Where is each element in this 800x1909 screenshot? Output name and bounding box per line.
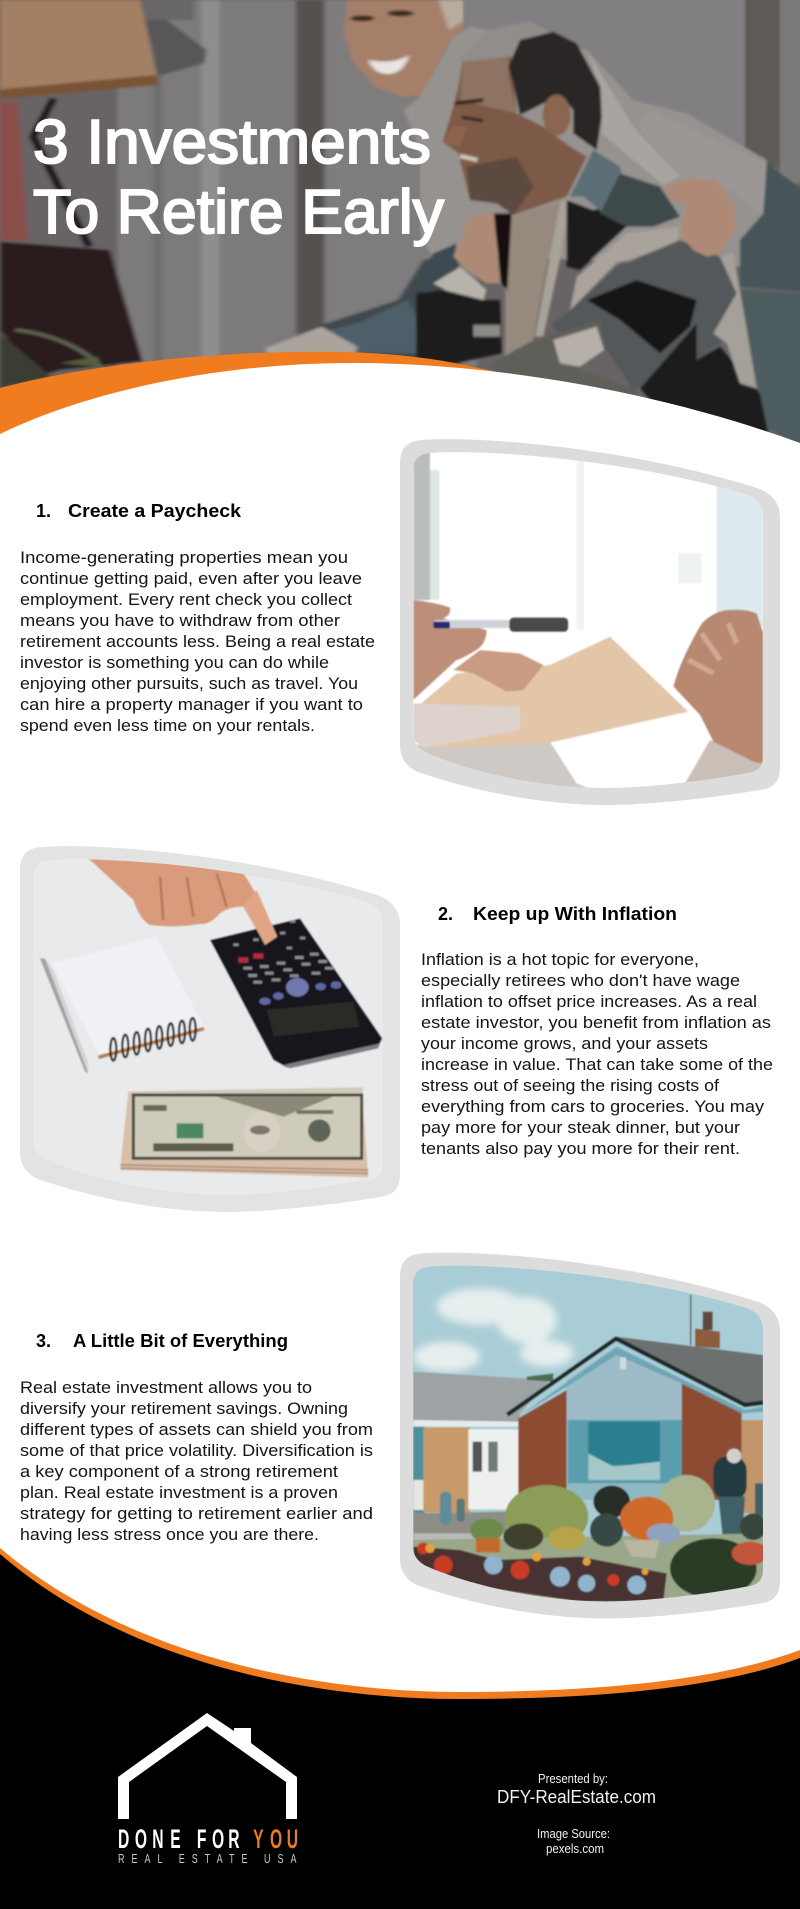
credits text: pexels.com — [546, 1841, 604, 1856]
body text 1: means you have to withdraw from other — [20, 612, 341, 630]
logo wordmark: DONE FOR — [118, 1824, 240, 1854]
body text 1: retirement accounts less. Being a real estate — [20, 633, 375, 651]
body text 1: employment. Every rent check you collect — [20, 591, 352, 609]
credits text: Presented by: — [538, 1771, 608, 1786]
logo: done for you real estate usa — [118, 1713, 298, 1866]
title: 3 Investments — [33, 108, 431, 177]
body text 2: tenants also pay you more for their rent. — [421, 1140, 740, 1158]
white content background — [0, 363, 800, 1680]
body text 2: inflation to offset price increases. As a real — [421, 993, 757, 1011]
body text 2: your income grows, and your assets — [421, 1035, 708, 1053]
body text 2: estate investor, you benefit from inflation as — [421, 1014, 771, 1032]
title: To Retire Early — [33, 178, 444, 247]
body text 3: Real estate investment allows you to — [20, 1379, 312, 1397]
body text 2 — [421, 951, 773, 1158]
body text 2: stress out of seeing the rising costs of — [421, 1077, 719, 1095]
heading: a little bit of everything: A Little Bit of Everything — [73, 1331, 288, 1351]
body text 1: Income-generating properties mean you — [20, 549, 348, 567]
heading: create a paycheck: Create a Paycheck — [68, 501, 242, 521]
photo frame 1 — [400, 439, 780, 805]
body text 2: Inflation is a hot topic for everyone, — [421, 951, 699, 969]
man in plaid jacket with woman's hand on his shoulder — [417, 0, 800, 447]
section 3 text — [20, 1331, 373, 1544]
body text 1: spend even less time on your rentals. — [20, 717, 315, 735]
body text 3: a key component of a strong retirement — [20, 1463, 338, 1481]
title — [33, 108, 444, 247]
photo: brick bungalow with flower garden — [410, 1260, 768, 1610]
photo: calculator, notebook and cash — [40, 859, 383, 1178]
body text 1: can hire a property manager if you want to — [20, 696, 363, 714]
credits text — [497, 1771, 656, 1856]
credits text: Image Source: — [537, 1826, 610, 1841]
heading: keep up with inflation: Keep up With Inflation — [473, 904, 677, 924]
credits text: DFY-RealEstate.com — [497, 1786, 656, 1807]
section 2 text — [421, 904, 773, 1158]
body text 1: enjoying other pursuits, such as travel. You — [20, 675, 358, 693]
body text 3: having less stress once you are there. — [20, 1526, 319, 1544]
body text 3: some of that price volatility. Diversification is — [20, 1442, 373, 1460]
photo frame 3 — [400, 1253, 780, 1618]
logo wordmark — [118, 1824, 298, 1866]
heading: keep up with inflation: 2. — [438, 904, 453, 924]
body text 3 — [20, 1379, 373, 1544]
section 1 text — [20, 501, 375, 735]
hero photo: couple smiling at laptop — [0, 0, 800, 467]
body text 1: investor is something you can do while — [20, 654, 329, 672]
body text 3: plan. Real estate investment is a proven — [20, 1484, 338, 1502]
photo: hands passing a document — [410, 447, 767, 793]
orange arc — [0, 352, 500, 460]
body text 2: increase in value. That can take some of the — [421, 1056, 773, 1074]
body text 2: everything from cars to groceries. You may — [421, 1098, 765, 1116]
body text 3: different types of assets can shield you from — [20, 1421, 373, 1439]
photo frame 2 — [20, 846, 400, 1212]
logo wordmark: YOU — [253, 1824, 298, 1854]
body text 1 — [20, 549, 375, 735]
body text 1: continue getting paid, even after you leave — [20, 570, 362, 588]
heading: a little bit of everything: 3. — [36, 1331, 51, 1351]
heading: create a paycheck: 1. — [36, 501, 51, 521]
body text 3: diversify your retirement savings. Owning — [20, 1400, 348, 1418]
body text 3: strategy for getting to retirement earlier and — [20, 1505, 373, 1523]
footer black band with orange curve — [0, 1548, 800, 1909]
icon: house outline — [118, 1713, 297, 1819]
body text 2: pay more for your steak dinner, but your — [421, 1119, 741, 1137]
body text 2: especially retirees who don't have wage — [421, 972, 740, 990]
logo wordmark: REAL ESTATE USA — [118, 1853, 297, 1866]
